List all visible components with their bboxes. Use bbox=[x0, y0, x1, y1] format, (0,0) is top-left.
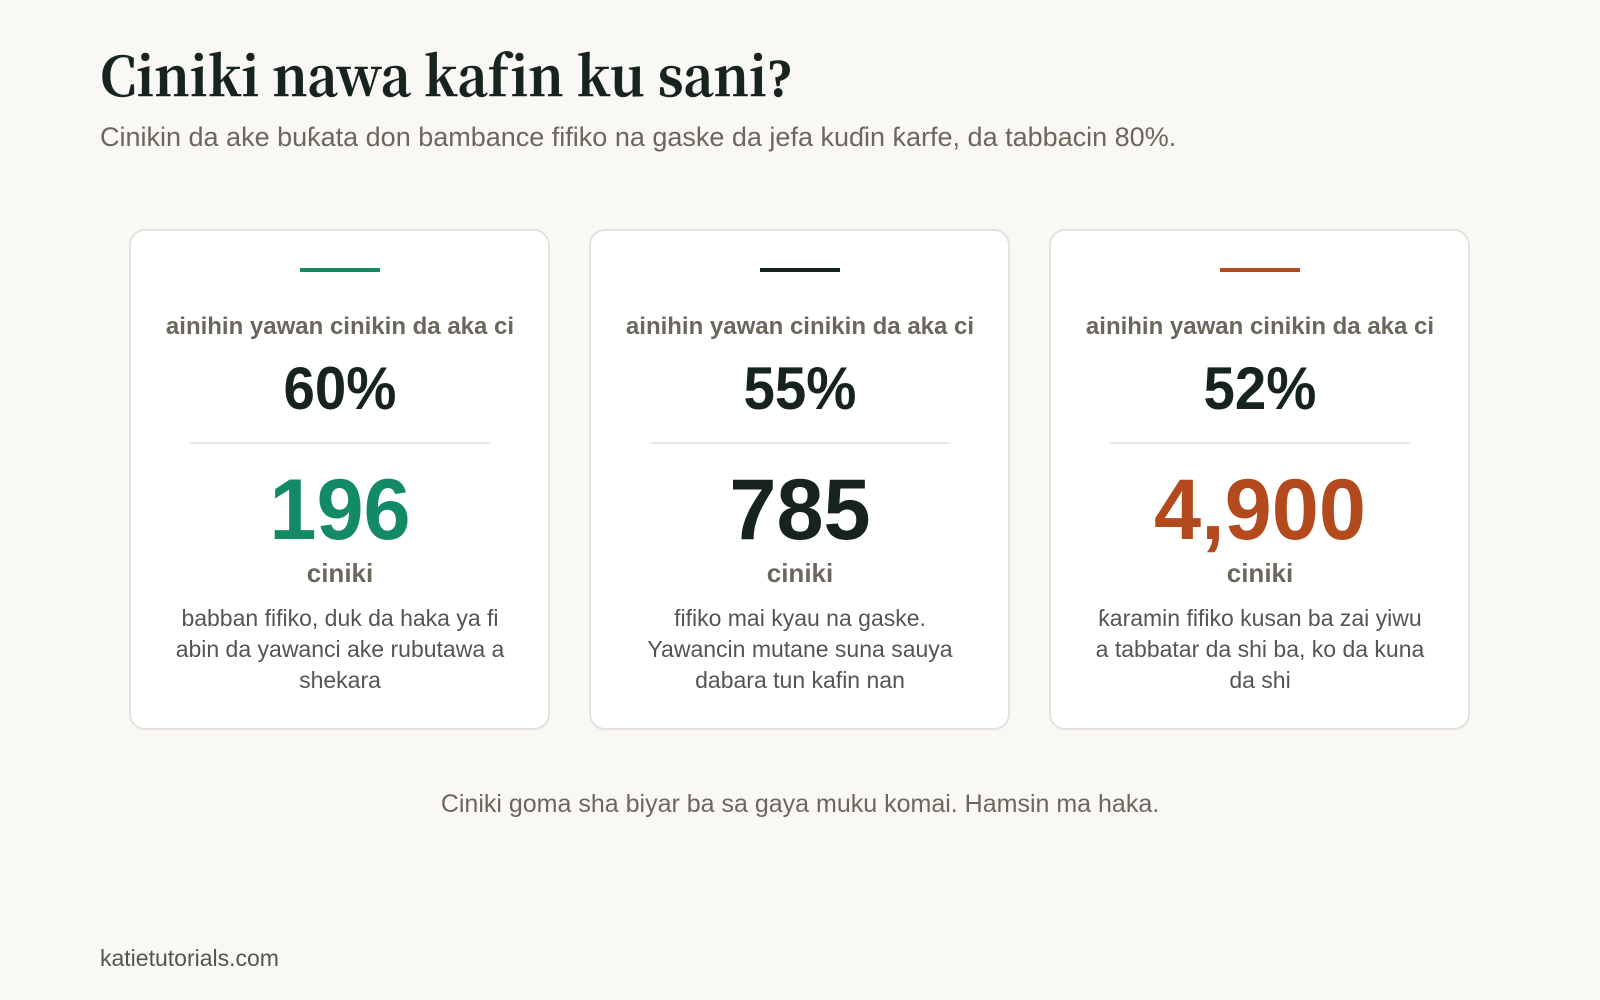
accent bar bbox=[300, 268, 380, 272]
description bbox=[1096, 605, 1424, 693]
source footer: katietutorials.com bbox=[100, 945, 279, 971]
closing note: Ciniki goma sha biyar ba sa gaya muku komai. Hamsin ma haka. bbox=[441, 790, 1159, 818]
accent bar bbox=[1220, 268, 1300, 272]
description: dabara tun kafin nan bbox=[695, 667, 905, 693]
unit: ciniki bbox=[767, 558, 833, 588]
percentage: 60% bbox=[284, 355, 396, 422]
description bbox=[647, 605, 953, 693]
big number: 785 bbox=[729, 462, 871, 558]
card label: ainihin yawan cinikin da aka ci bbox=[166, 313, 514, 340]
description bbox=[176, 605, 504, 693]
description: ƙaramin fifiko kusan ba zai yiwu bbox=[1098, 605, 1422, 631]
description: da shi bbox=[1229, 667, 1291, 693]
percentage: 55% bbox=[744, 355, 856, 422]
description: fifiko mai kyau na gaske. bbox=[674, 605, 926, 631]
panel: 4,900 ciniki bbox=[1049, 229, 1470, 730]
accent bar bbox=[760, 268, 840, 272]
description: Yawancin mutane suna sauya bbox=[647, 636, 953, 662]
percentage: 52% bbox=[1204, 355, 1316, 422]
unit: ciniki bbox=[1227, 558, 1293, 588]
big number: 4,900 bbox=[1154, 462, 1366, 558]
description: a tabbatar da shi ba, ko da kuna bbox=[1096, 636, 1424, 662]
unit: ciniki bbox=[307, 558, 373, 588]
panel: 196 ciniki bbox=[129, 229, 550, 730]
card label: ainihin yawan cinikin da aka ci bbox=[626, 313, 974, 340]
title: Ciniki nawa kafin ku sani? bbox=[100, 35, 793, 112]
big number: 196 bbox=[269, 462, 411, 558]
description: abin da yawanci ake rubutawa a bbox=[176, 636, 504, 662]
subtitle: Cinikin da ake buƙata don bambance fifiko na gaske da jefa kuɗin ƙarfe, da tabbacin 80%. bbox=[100, 122, 1176, 152]
description: shekara bbox=[299, 667, 381, 693]
panel: 785 ciniki bbox=[589, 229, 1010, 730]
description: babban fifiko, duk da haka ya fi bbox=[181, 605, 499, 631]
card label: ainihin yawan cinikin da aka ci bbox=[1086, 313, 1434, 340]
